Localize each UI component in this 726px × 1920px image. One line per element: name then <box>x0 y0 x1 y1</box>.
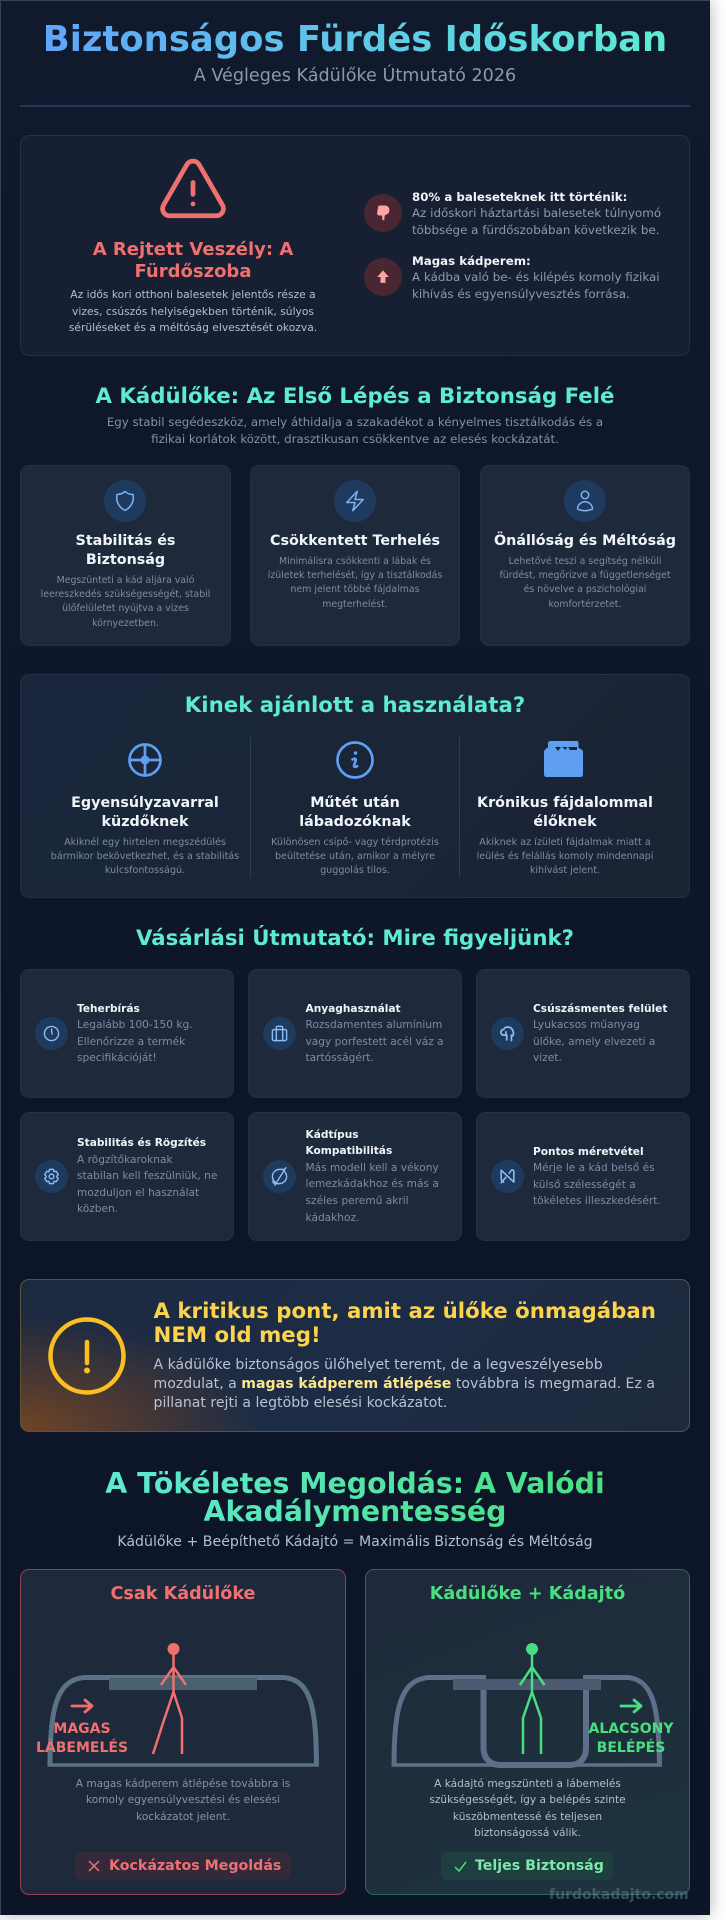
text: stability <box>41 575 210 629</box>
heading: critical point <box>154 1298 656 1348</box>
icon: alert circle <box>48 1317 126 1395</box>
text: balance <box>51 837 239 876</box>
text: independence: és növelve a pszichológiai <box>524 584 646 595</box>
text: seat only: kockázatot jelent. <box>136 1811 230 1823</box>
label: low entry: ALACSONY <box>589 1720 673 1736</box>
text: non-slip surface: vizet. <box>533 1052 562 1064</box>
heading: balance <box>71 794 219 830</box>
text: seat only: komoly egyensúlyvesztési és elesési <box>86 1794 280 1806</box>
seat <box>453 1679 601 1690</box>
text: critical point <box>154 1357 655 1411</box>
label: low entry <box>588 1720 674 1756</box>
label: low entry: BELÉPÉS <box>597 1740 665 1756</box>
heading: buying guide: Vásárlási Útmutató: Mire figyeljünk? <box>136 926 574 950</box>
text: critical point: A kádülőke biztonságos ülőhelyet teremt, de a legveszélyesebb <box>154 1357 603 1373</box>
text: compatibility: lemezkádakhoz és más a <box>306 1178 439 1190</box>
panel: stability card <box>20 465 231 646</box>
heading: balance: Egyensúlyzavarral <box>71 794 219 810</box>
panel: reduced strain card <box>250 465 460 646</box>
heading: critical point: A kritikus pont, amit az ülőke önmagában <box>154 1298 656 1324</box>
icon: non-slip hand <box>491 1017 524 1050</box>
text: stability: Megszünteti a kád aljára való <box>57 575 194 586</box>
text: fixing: Stabilitás és Rögzítés <box>77 1137 206 1149</box>
icon: chronic pain jar <box>544 741 583 777</box>
icon: balance target <box>128 743 162 777</box>
text: bath seat intro <box>107 415 603 446</box>
panel: independence card <box>480 465 690 646</box>
divider right <box>459 737 460 878</box>
heading: critical point: NEM old meg! <box>154 1323 321 1348</box>
text: 80 percent stat: 80% a baleseteknek itt történik: <box>412 190 627 204</box>
text: seat only: A magas kádperem átlépése továbbra is <box>76 1778 290 1790</box>
icon: measuring scissors <box>491 1160 524 1193</box>
text: bath seat intro: Egy stabil segédeszköz, amely áthidalja a szakadékot a kényelmes tisztálkodás és a <box>107 415 603 429</box>
text: high rim: Magas kádperem: <box>412 254 531 268</box>
icon: cog <box>35 1160 68 1193</box>
text: materials: vagy porfestett acél váz a <box>306 1036 444 1048</box>
text: load capacity: Legalább 100-150 kg. <box>77 1019 193 1031</box>
text: compatibility: Kádtípus <box>306 1129 359 1141</box>
heading: who is it for: Kinek ajánlott a használata? <box>185 693 525 718</box>
text: materials <box>306 1003 444 1064</box>
text: materials: Anyaghasználat <box>306 1003 401 1015</box>
text: post surgery: guggolás tilos. <box>320 865 390 876</box>
figure: person walking in <box>520 1643 544 1754</box>
heading: stability <box>76 532 175 568</box>
text: stability: leereszkedés szükségességét, stabil <box>41 589 210 600</box>
text: compatibility: széles peremű akril <box>306 1195 409 1207</box>
header divider <box>20 105 690 106</box>
text: compatibility: Más modell kell a vékony <box>306 1162 439 1174</box>
text: reduced strain: megterhelést. <box>322 599 388 610</box>
text: load capacity: Teherbírás <box>77 1003 140 1015</box>
icon: 80 percent stat <box>364 194 402 232</box>
tub outline with door opening <box>394 1678 660 1766</box>
text: independence: fürdést, megőrizve a függetlenséget <box>499 570 671 581</box>
text: independence: Lehetővé teszi a segítség nélküli <box>509 556 661 567</box>
text: measuring: Pontos méretvétel <box>533 1146 644 1158</box>
illustration: tub with door <box>392 1643 662 1768</box>
heading: hidden danger: Fürdőszoba <box>135 261 251 282</box>
heading: chronic pain: élőknek <box>533 814 597 830</box>
text: 80 percent stat: többsége a fürdőszobában következik be. <box>412 223 660 237</box>
text: seat only <box>76 1778 290 1823</box>
text: seat plus door: A kádajtó megszünteti a lábemelés <box>434 1778 621 1790</box>
arrow <box>621 1700 641 1712</box>
text: non-slip surface: Lyukacsos műanyag <box>533 1019 640 1031</box>
heading: chronic pain <box>477 794 653 830</box>
icon: bolt <box>334 480 376 522</box>
tub outline <box>50 1678 316 1766</box>
icon: shield <box>104 480 146 522</box>
icon: warning triangle <box>160 158 226 218</box>
text: hidden danger description: Az idős kori otthoni balesetek jelentős része a <box>70 288 316 301</box>
label: high leg lift: LÁBEMELÉS <box>36 1740 128 1756</box>
icon: high rim <box>364 258 402 296</box>
figure: person stepping over rim <box>153 1643 186 1754</box>
text: fixing: mozduljon el használat <box>77 1187 199 1199</box>
text: independence: komfortérzetet. <box>549 599 621 610</box>
text: non-slip surface <box>533 1003 668 1064</box>
heading: balance: küzdőknek <box>102 814 188 830</box>
text: non-slip surface: Csúszásmentes felület <box>533 1003 667 1015</box>
seat <box>109 1678 257 1690</box>
text: materials: tartósságért. <box>306 1052 374 1064</box>
text: bath seat intro: fizikai korlátok között, drasztikusan csökkentve az elesés kockázatát. <box>151 432 559 446</box>
text: chronic pain <box>477 837 653 876</box>
label: high leg lift <box>36 1720 128 1756</box>
divider left <box>250 737 251 878</box>
text: measuring: Mérje le a kád belső és <box>533 1162 655 1174</box>
subtitle: A Végleges Kádülőke Útmutató 2026 <box>194 66 516 86</box>
icon: user <box>564 480 606 522</box>
illustration: tub with high rim <box>48 1643 319 1767</box>
arrow <box>72 1700 92 1712</box>
heading: seat plus door: Kádülőke + Kádajtó <box>430 1584 625 1604</box>
text: critical point: pillanat rejti a legtöbb elesési kockázatot. <box>154 1395 447 1411</box>
text: high rim: kihívás és egyensúlyvesztés forrása. <box>412 287 630 301</box>
icon: briefcase <box>262 1017 296 1050</box>
badge: full safety <box>441 1852 613 1880</box>
label: high leg lift: MAGAS <box>53 1720 111 1736</box>
icon: x mark <box>88 1860 100 1872</box>
text: stability: környezetben. <box>92 618 159 629</box>
text: compatibility: kádakhoz. <box>306 1212 359 1224</box>
panel: who is it for <box>20 674 690 898</box>
panel: materials <box>248 969 462 1098</box>
watermark: furdokadajto.com <box>549 1887 689 1903</box>
heading: chronic pain: Krónikus fájdalommal <box>477 794 653 810</box>
text: seat plus door <box>429 1778 626 1839</box>
heading: stability: Stabilitás és <box>76 532 175 548</box>
text: seat plus door: küszöbmentessé és teljesen <box>453 1811 602 1823</box>
door <box>484 1686 586 1765</box>
text: reduced strain: nem jelent többé fájdalmas <box>291 584 419 595</box>
text: post surgery: beültetése után, amikor a mélyre <box>275 851 435 862</box>
panel: seat plus door <box>365 1569 690 1895</box>
text: fixing <box>77 1137 217 1215</box>
text: balance: bármikor bekövetkezhet, és a stabilitás <box>51 851 239 862</box>
heading: stability: Biztonság <box>86 552 165 568</box>
text: chronic pain: kihívást jelent. <box>530 865 600 876</box>
text: hidden danger description <box>69 288 317 334</box>
panel: critical point <box>20 1279 690 1432</box>
badge label: Teljes Biztonság <box>475 1858 604 1874</box>
text: load capacity: Ellenőrizze a termék <box>77 1036 185 1048</box>
icon: check mark <box>454 1862 466 1872</box>
text: stability: ülőfelületet nyújtva a vizes <box>62 603 189 614</box>
heading: reduced strain: Csökkentett Terhelés <box>270 532 440 548</box>
text: high rim: A kádba való be- és kilépés komoly fizikai <box>412 270 660 284</box>
heading: post surgery: lábadozóknak <box>299 814 411 830</box>
tub floor <box>48 1763 319 1767</box>
text: balance: kulcsfontosságú. <box>105 865 185 876</box>
text: fixing: stabilan kell feszülniük, ne <box>77 1170 217 1182</box>
text: load capacity: specifikációját! <box>77 1052 157 1064</box>
heading: perfect solution <box>60 1470 650 1530</box>
badge label: Kockázatos Megoldás <box>109 1858 281 1874</box>
heading: post surgery <box>299 794 411 830</box>
text: post surgery <box>271 837 439 876</box>
heading: independence: Önállóság és Méltóság <box>494 532 676 548</box>
text: materials: Rozsdamentes alumínium <box>306 1019 442 1031</box>
text: independence <box>499 556 671 610</box>
text: 80 percent stat <box>412 190 661 237</box>
icon: info circle <box>336 741 374 779</box>
text: reduced strain: Minimálisra csökkenti a lábak és <box>279 556 431 567</box>
text: measuring: tökéletes illeszkedésért. <box>533 1195 661 1207</box>
panel: non-slip surface <box>476 969 690 1098</box>
text: fixing: A rögzítőkaroknak <box>77 1154 173 1166</box>
text: seat plus door: szükségességét, így a belépés szinte <box>429 1794 626 1806</box>
heading: hidden danger <box>92 239 294 282</box>
text: high rim <box>412 254 660 301</box>
text: reduced strain <box>268 556 442 610</box>
text: seat plus door: biztonságossá válik. <box>474 1827 581 1839</box>
panel: measuring <box>476 1112 690 1241</box>
heading: hidden danger: A Rejtett Veszély: A <box>93 239 293 260</box>
text: chronic pain: leülés és felállás komoly mindennapi <box>477 851 653 862</box>
heading: post surgery: Műtét után <box>310 794 400 810</box>
icon: clock gauge <box>35 1017 68 1050</box>
heading: bath seat: A Kádülőke: Az Első Lépés a Biztonság Felé <box>96 384 614 409</box>
tub floor <box>392 1763 662 1767</box>
panel: fixing <box>20 1112 234 1241</box>
text: measuring: külső szélességét a <box>533 1179 636 1191</box>
text: chronic pain: Akiknek az ízületi fájdalmak miatt a <box>479 837 651 848</box>
text: balance: Akiknél egy hirtelen megszédülés <box>64 837 226 848</box>
panel: hidden danger <box>20 135 690 356</box>
text: non-slip surface: ülőke, amely elvezeti a <box>533 1036 655 1048</box>
heading: perfect solution: A Tökéletes Megoldás: A Valódi <box>105 1467 605 1500</box>
text: fixing: közben. <box>77 1203 118 1215</box>
text: 80 percent stat: Az időskori háztartási balesetek túlnyomó <box>412 206 661 220</box>
text: reduced strain: ízületek terhelését, így a tisztálkodás <box>268 570 442 581</box>
text: compatibility <box>306 1129 439 1224</box>
panel: compatibility <box>248 1112 462 1241</box>
title: Biztonságos Fürdés Időskorban <box>43 19 667 60</box>
text: load capacity <box>77 1003 193 1064</box>
panel: seat only <box>20 1569 346 1895</box>
text: compatibility: Kompatibilitás <box>306 1145 392 1157</box>
text: hidden danger description: sérüléseket és a méltóság elvesztését okozva. <box>69 321 317 334</box>
text: post surgery: Különösen csípő- vagy térdprotézis <box>271 837 439 848</box>
badge: risky solution <box>75 1852 291 1880</box>
text: perfect solution subtitle: Kádülőke + Beépíthető Kádajtó = Maximális Biztonság és Méltóság <box>117 1534 593 1550</box>
heading: seat only: Csak Kádülőke <box>110 1584 256 1604</box>
text: critical point: mozdulat, a magas kádperem átlépése továbbra is megmarad. Ez a <box>154 1376 655 1392</box>
text: measuring <box>533 1146 661 1207</box>
heading: perfect solution: Akadálymentesség <box>204 1495 506 1528</box>
text: hidden danger description: vizes, csúszós helyiségekben történik, súlyos <box>72 305 314 318</box>
panel: load capacity <box>20 969 234 1098</box>
icon: compatibility cycle <box>262 1160 296 1193</box>
